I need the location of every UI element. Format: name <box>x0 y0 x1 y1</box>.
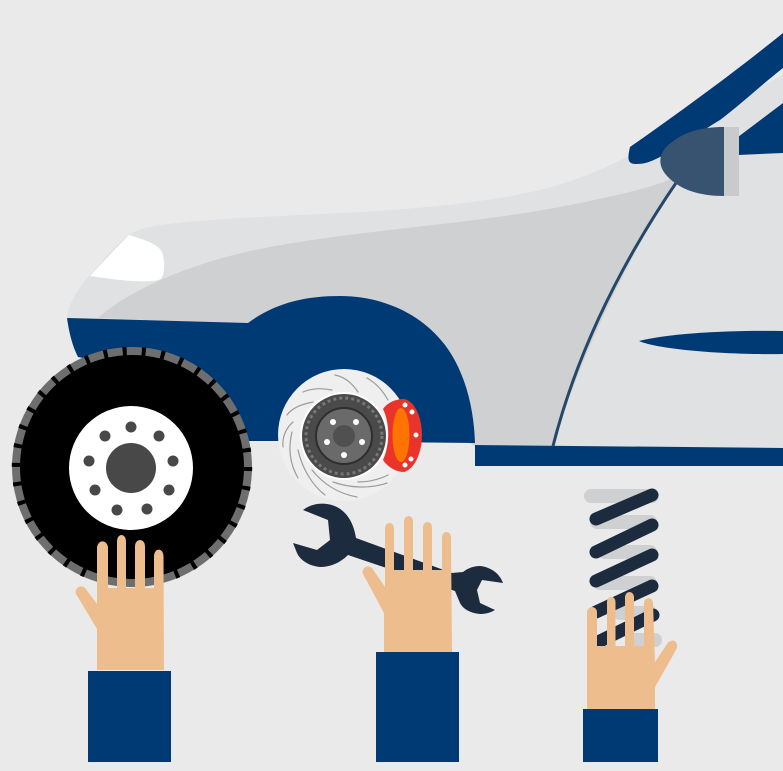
wheel rim <box>69 406 193 530</box>
car front body <box>67 33 783 466</box>
hand <box>363 516 452 652</box>
spanner <box>293 504 503 614</box>
left hand holding tyre <box>76 535 171 762</box>
rotor vent grooves <box>283 375 388 497</box>
sleeve <box>88 671 171 762</box>
windscreen strip <box>628 33 783 164</box>
tyre <box>12 347 252 587</box>
right hand holding spring <box>583 592 677 762</box>
coil spring <box>591 495 655 642</box>
blue side sill <box>475 445 783 466</box>
middle hand holding spanner <box>363 516 459 762</box>
front spring coils <box>596 495 653 642</box>
hand <box>587 592 677 709</box>
rear spring coils <box>591 496 655 640</box>
wing mirror <box>660 127 739 196</box>
side window <box>738 103 783 155</box>
brake disc assembly <box>278 369 422 501</box>
sleeve <box>583 709 658 762</box>
blue wheel arch and lower bumper <box>67 296 475 443</box>
upper body panel <box>67 75 783 448</box>
sleeve <box>376 652 459 762</box>
door handle stripe <box>639 331 783 354</box>
headlight <box>90 235 164 281</box>
disc hub <box>300 392 388 480</box>
hub bolts <box>324 419 365 458</box>
shaded fender <box>98 176 678 446</box>
door shut line <box>553 180 678 446</box>
rim bolts <box>84 422 178 516</box>
brake caliper <box>383 399 422 472</box>
hand <box>76 535 164 670</box>
tyre with alloy wheel <box>12 347 252 587</box>
brake rotor <box>278 369 410 501</box>
